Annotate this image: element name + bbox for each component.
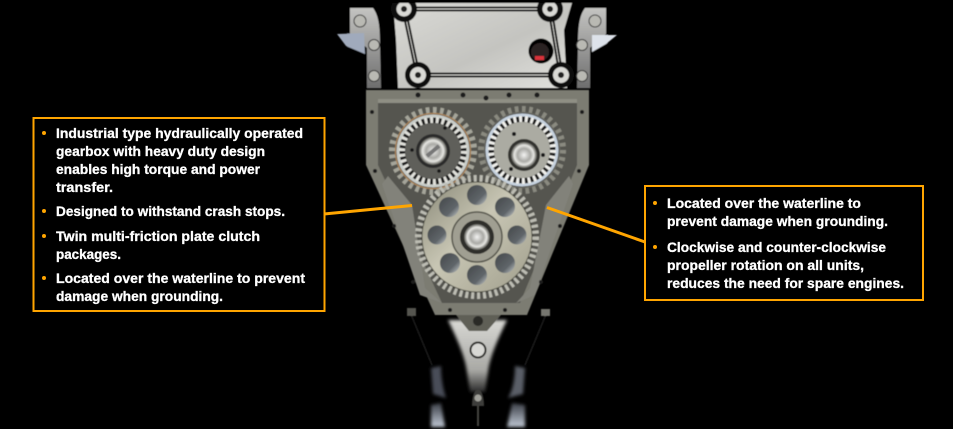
lower leg casting [410, 312, 547, 427]
callout: right: reduces the need for spare engines. [667, 275, 904, 291]
right leader line [547, 208, 645, 242]
lower fins [431, 366, 525, 427]
callout: left: gearbox with heavy duty design [56, 143, 265, 159]
callout: left: Located over the waterline to prevent [56, 270, 305, 286]
callout: left: packages. [56, 246, 121, 262]
lightening holes [428, 185, 526, 285]
right clutch gear [481, 109, 563, 191]
main output gear [418, 178, 536, 296]
left clutch gear [392, 110, 474, 192]
callout: right [645, 186, 923, 300]
callout: left: Twin multi-friction plate clutch [56, 228, 260, 244]
callout: right: propeller rotation on all units, [667, 257, 864, 273]
callout: right: prevent damage when grounding. [667, 213, 888, 229]
callout: left: damage when grounding. [56, 288, 223, 304]
callout: left: Designed to withstand crash stops. [56, 203, 285, 219]
callout: left: transfer. [56, 179, 113, 195]
callout: left [34, 118, 324, 311]
callout: left: enables high torque and power [56, 161, 261, 177]
left leader line [324, 206, 412, 214]
callout: left: Industrial type hydraulically operated [56, 125, 303, 141]
top mounting plate [337, 0, 617, 89]
callout: right: Clockwise and counter-clockwise [667, 239, 886, 255]
gearbox housing [366, 90, 589, 331]
callout: right: Located over the waterline to [667, 195, 861, 211]
engine illustration [337, 0, 617, 427]
